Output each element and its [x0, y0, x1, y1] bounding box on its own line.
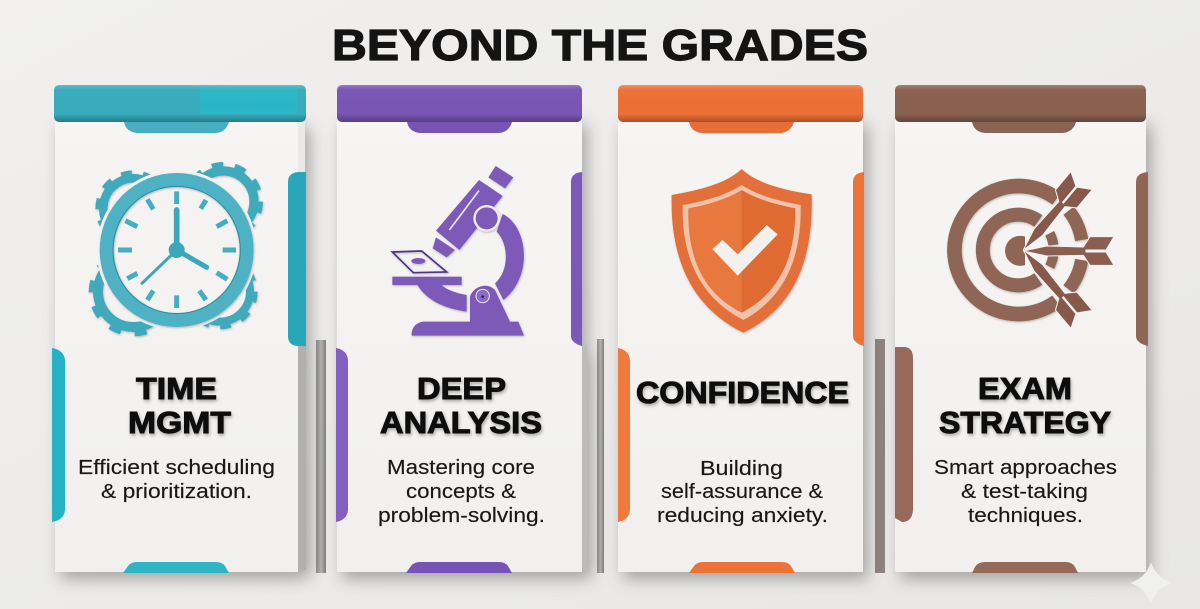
panel: deep analysis [336, 85, 604, 573]
heading: TIME [136, 371, 217, 406]
description: reducing anxiety. [657, 505, 828, 527]
gears [92, 165, 260, 333]
clock ring [107, 180, 247, 320]
description: self-assurance & [661, 481, 824, 503]
right strip [571, 172, 582, 346]
top tab [407, 122, 512, 133]
icon: shield with check [672, 169, 812, 333]
top bar [618, 85, 863, 122]
heading: CONFIDENCE [636, 375, 849, 410]
left strip [618, 348, 630, 522]
right strip [1136, 172, 1148, 346]
heading: DEEP [417, 371, 506, 406]
card body [895, 118, 1146, 572]
description: Efficient scheduling [78, 457, 275, 479]
top bar [895, 85, 1146, 122]
arrow: middle [1023, 237, 1114, 265]
bottom tab [406, 562, 512, 573]
title: BEYOND THE GRADES [332, 21, 868, 70]
description: Building [700, 458, 783, 480]
clock backing [97, 170, 257, 330]
right strip [853, 172, 864, 346]
left strip [336, 348, 348, 522]
arrow: upper [1013, 172, 1092, 259]
grey divider strip [597, 339, 604, 573]
panel: exam strategy [895, 85, 1148, 573]
heading: MGMT [128, 405, 231, 440]
clock hands [142, 210, 207, 283]
description: problem-solving. [378, 505, 545, 527]
left strip [52, 348, 65, 522]
bullseye [1005, 236, 1025, 266]
arrow: lower [1013, 241, 1092, 328]
left strip [895, 347, 913, 522]
tick marks [118, 191, 236, 308]
description: concepts & [406, 481, 517, 503]
card body [618, 118, 863, 572]
heading [128, 371, 231, 440]
heading [939, 371, 1111, 440]
icon: clock with gears [92, 165, 260, 333]
panel: time management [52, 85, 326, 573]
description [378, 457, 545, 527]
icon: sparkle [1130, 562, 1172, 604]
top tab [689, 122, 794, 133]
description: Mastering core [387, 457, 535, 479]
top tab [124, 122, 229, 133]
description: & test-taking [961, 481, 1088, 503]
description [934, 457, 1117, 527]
top bar [337, 85, 582, 122]
icon: microscope [392, 166, 524, 336]
card body [337, 118, 587, 572]
description: & prioritization. [101, 481, 252, 503]
top bar [54, 85, 306, 122]
bottom tab [689, 562, 795, 573]
heading: STRATEGY [939, 405, 1111, 440]
heading [380, 371, 542, 440]
description [657, 458, 828, 527]
bottom tab [972, 562, 1078, 573]
heading: EXAM [978, 371, 1072, 406]
bottom tab [123, 562, 229, 573]
rings [954, 186, 1082, 314]
description: Smart approaches [934, 457, 1117, 479]
heading: ANALYSIS [380, 405, 542, 440]
card body [55, 118, 306, 572]
icon: target with arrows [954, 172, 1114, 328]
description [78, 457, 275, 503]
grey divider strip [875, 339, 885, 573]
description: techniques. [968, 505, 1083, 527]
panel: confidence [618, 85, 885, 573]
grey divider strip [316, 340, 326, 573]
top tab [972, 122, 1076, 133]
right strip [288, 172, 306, 346]
